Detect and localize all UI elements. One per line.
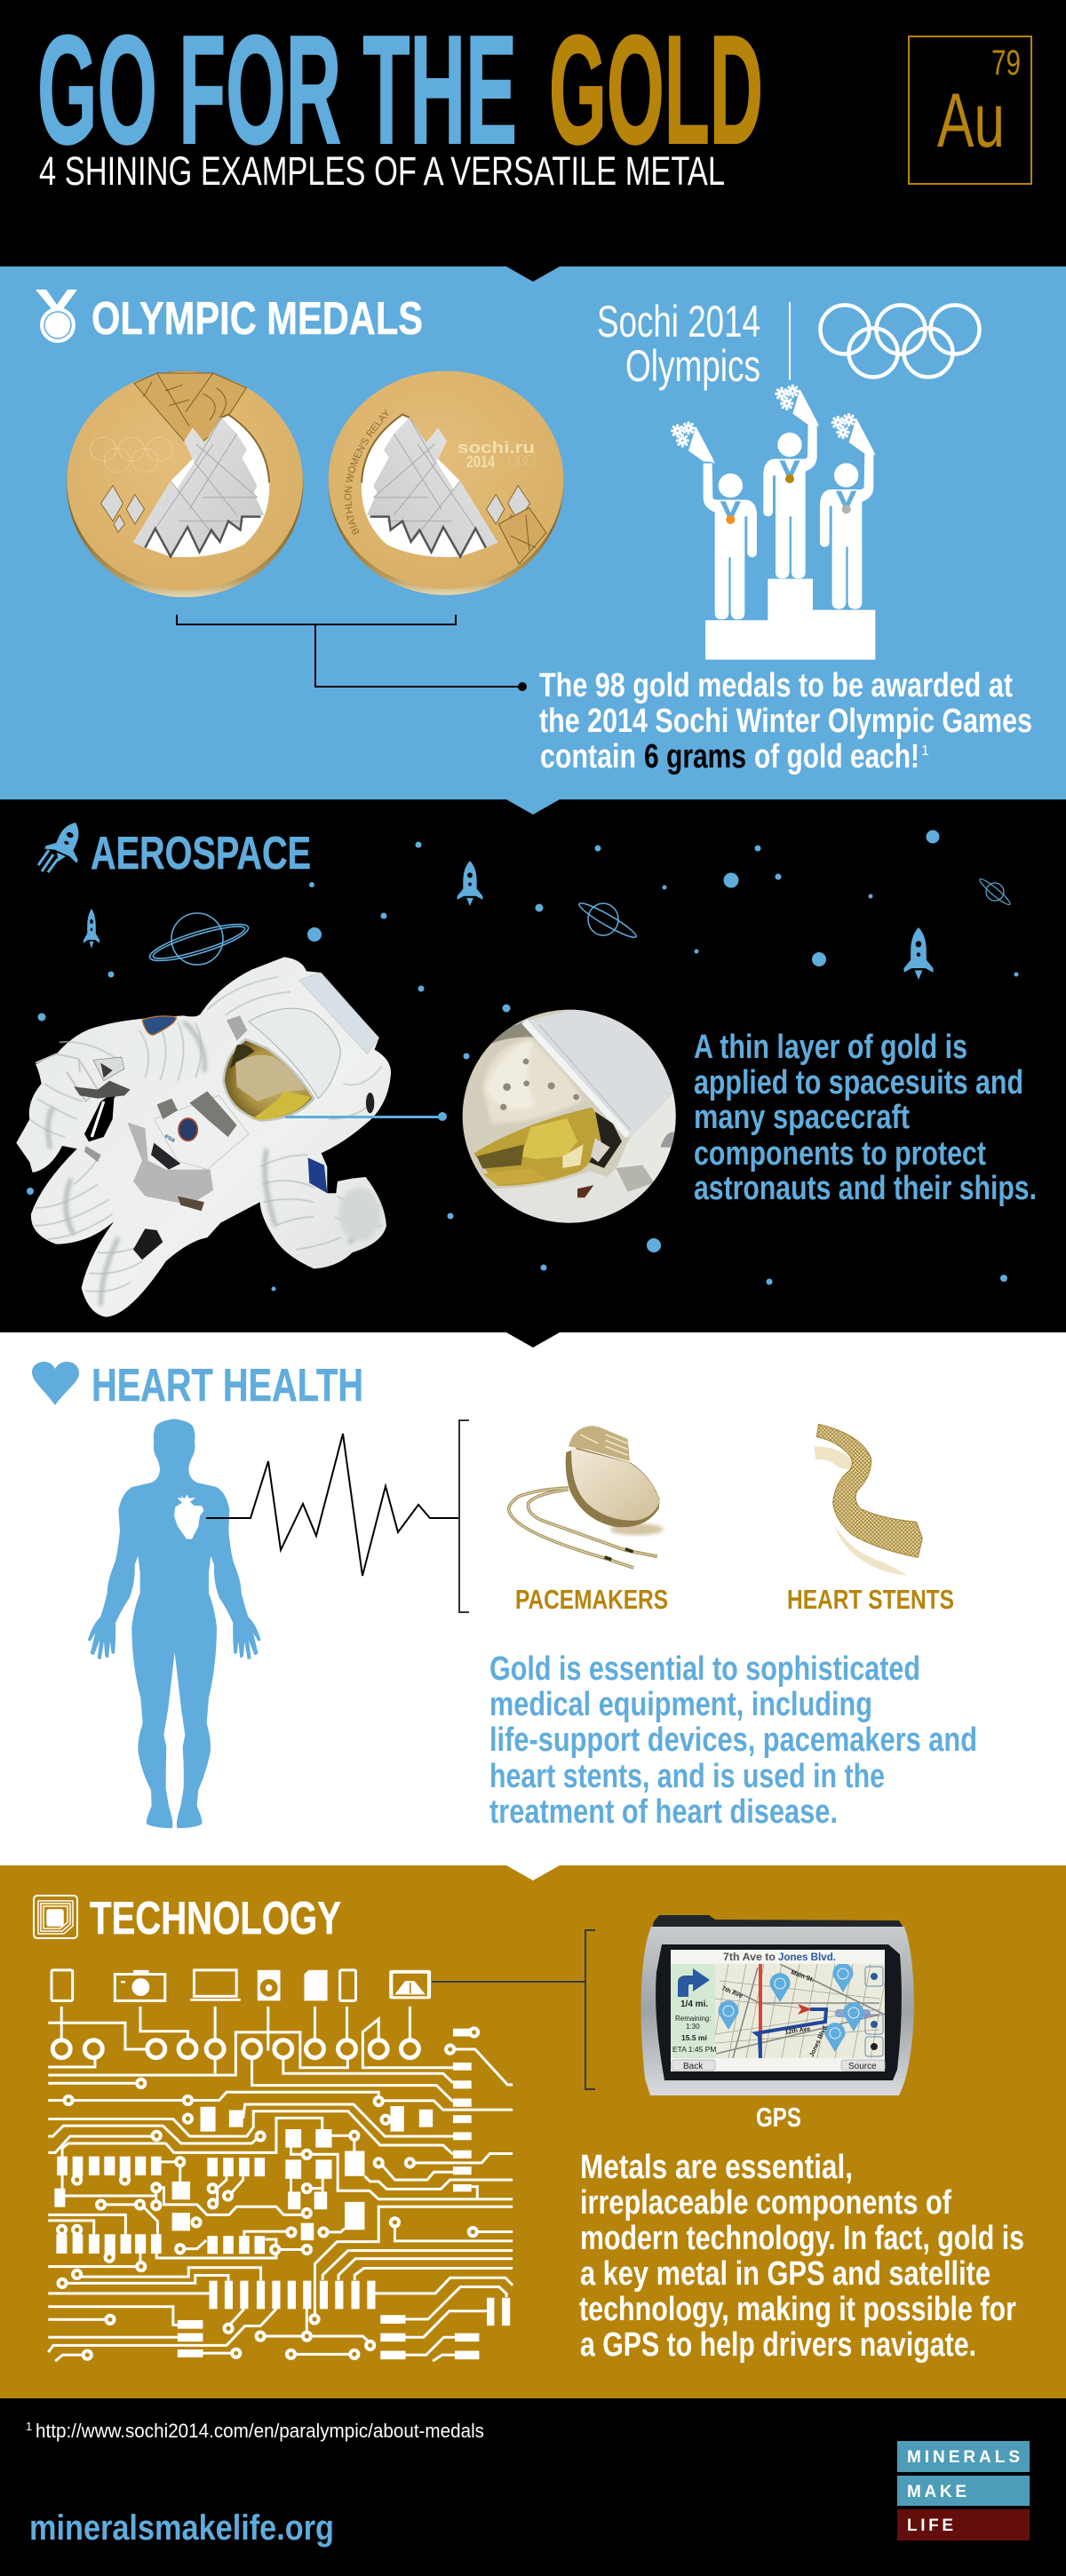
icon: white anatomical heart [174,1495,203,1539]
heading: technology: TECHNOLOGY [90,1893,341,1944]
text: metals essential: a GPS to help drivers navigate. [580,2326,976,2364]
logo: minerals make life: MINERALS [907,2448,1020,2467]
panel: technology [0,1865,1066,2398]
icon: podium with athletes [671,385,875,660]
gps device: 1:30 [686,2023,700,2031]
icon: small planet [978,877,1012,907]
connector line [285,1112,447,1121]
text: thin layer of gold: components to protect [694,1135,986,1173]
text: medical equipment: heart stents, and is used in the [489,1758,885,1795]
pacemaker photo [509,1426,664,1568]
footer [0,2398,1066,2576]
infographic canvas: GOLD [549,3,763,176]
text: gold medals fact: of gold each! [754,738,919,775]
label: heart stents: HEART STENTS [787,1584,954,1615]
subtitle: 4 SHINING EXAMPLES OF A VERSATILE METAL [39,148,725,194]
stars [27,830,1018,1292]
text: gold medals fact: contain [540,738,636,775]
panel: aerospace [0,799,1066,1332]
olympics label: Sochi 2014 [597,297,760,346]
logo: minerals make life [897,2441,1030,2540]
website url: mineralsmakelife.org [29,2508,334,2548]
icon: rocket centre [457,861,482,906]
gps device: ETA 1:45 PM [672,2045,716,2054]
text: gold medals fact [539,667,1032,775]
label: gps: GPS [756,2102,801,2133]
gps device: Source [848,2062,877,2071]
connector to gps [432,1930,595,2089]
gps device: Remaining: [675,2015,711,2023]
gps device: 15.5 mi [681,2033,707,2042]
device icons [52,1970,431,2001]
medal photo: back [329,371,563,595]
footnote: http://www.sochi2014.com/en/paralympic/about-medals [36,2420,484,2442]
icon: large planet [147,913,251,967]
text: medical equipment [489,1650,977,1831]
icon: medal [36,290,77,343]
gps device: 7th Ave [720,1985,744,2000]
helmet close-up circle [462,1009,676,1223]
human body silhouette [88,1419,261,1828]
label: pacemakers: PACEMAKERS [515,1584,668,1615]
olympics label [597,297,791,391]
circuit traces [48,2007,513,2361]
icon: rocket right [904,927,933,980]
header background [0,0,1066,266]
gps device: 1/4 mi. [680,2000,708,2009]
logo: minerals make life: LIFE [907,2516,953,2535]
stent photo [815,1424,922,1575]
medal photo: front [67,371,303,597]
icon: olympic rings [821,306,979,377]
text: metals essential: irreplaceable components of [580,2184,951,2222]
heading: heart health: HEART HEALTH [91,1360,363,1411]
text: thin layer of gold: A thin layer of gold is [694,1029,967,1066]
icon: rocket left [84,909,99,949]
astronaut photo: esa [163,1132,178,1144]
text: medical equipment: Gold is essential to sophisticated [489,1650,920,1688]
gps device: Back [683,2062,704,2071]
icon: heart [32,1362,79,1405]
heading: olympic medals: OLYMPIC MEDALS [91,293,423,345]
text: medical equipment: medical equipment, including [489,1686,872,1723]
heartbeat line [206,1434,459,1576]
icon: rocket heading [38,815,91,872]
text: gold medals fact: 6 grams [644,738,746,775]
text: medical equipment: treatment of heart disease. [489,1793,838,1831]
text: gold medals fact: 1 [921,743,929,759]
gps device: 7th Ave to [723,1951,776,1963]
title: GO FOR THE [37,3,517,176]
icon: medium planet [577,899,639,942]
bracket [459,1420,469,1612]
periodic table element box: 79 [991,44,1021,83]
gps device: Jones Blvd. [808,2023,829,2058]
gps device [641,1915,914,2095]
circuit nodes [52,2028,478,2359]
medal photo: back: BIATHLON WOMEN'S RELAY [345,409,389,535]
text: thin layer of gold [694,1029,1037,1207]
circuit board illustration [48,1970,513,2361]
gps device: 12th Ave [784,2026,811,2036]
medal photo: back: 2014 [466,453,495,471]
text: metals essential: Metals are essential, [580,2149,853,2186]
medal photo: back: sochi.ru [457,439,535,457]
connector bracket [177,615,526,690]
logo: minerals make life: MAKE [907,2483,967,2501]
gps device: Jones Blvd. [778,1951,836,1963]
periodic table element box: Au [937,78,1005,163]
periodic table element box [909,36,1031,184]
circuit pads [54,2029,510,2359]
gps device: Main St. [790,1969,815,1984]
heading: aerospace: AEROSPACE [91,828,311,879]
olympics label: Olympics [625,341,760,391]
panel: heart health [0,1332,1066,1865]
footnote: 1 [26,2420,32,2433]
text: metals essential [579,2149,1024,2364]
astronaut photo [16,957,391,1317]
icon: chip [34,1896,77,1938]
text: thin layer of gold: many spacecraft [694,1099,910,1136]
panel: olympic medals [0,266,1066,799]
